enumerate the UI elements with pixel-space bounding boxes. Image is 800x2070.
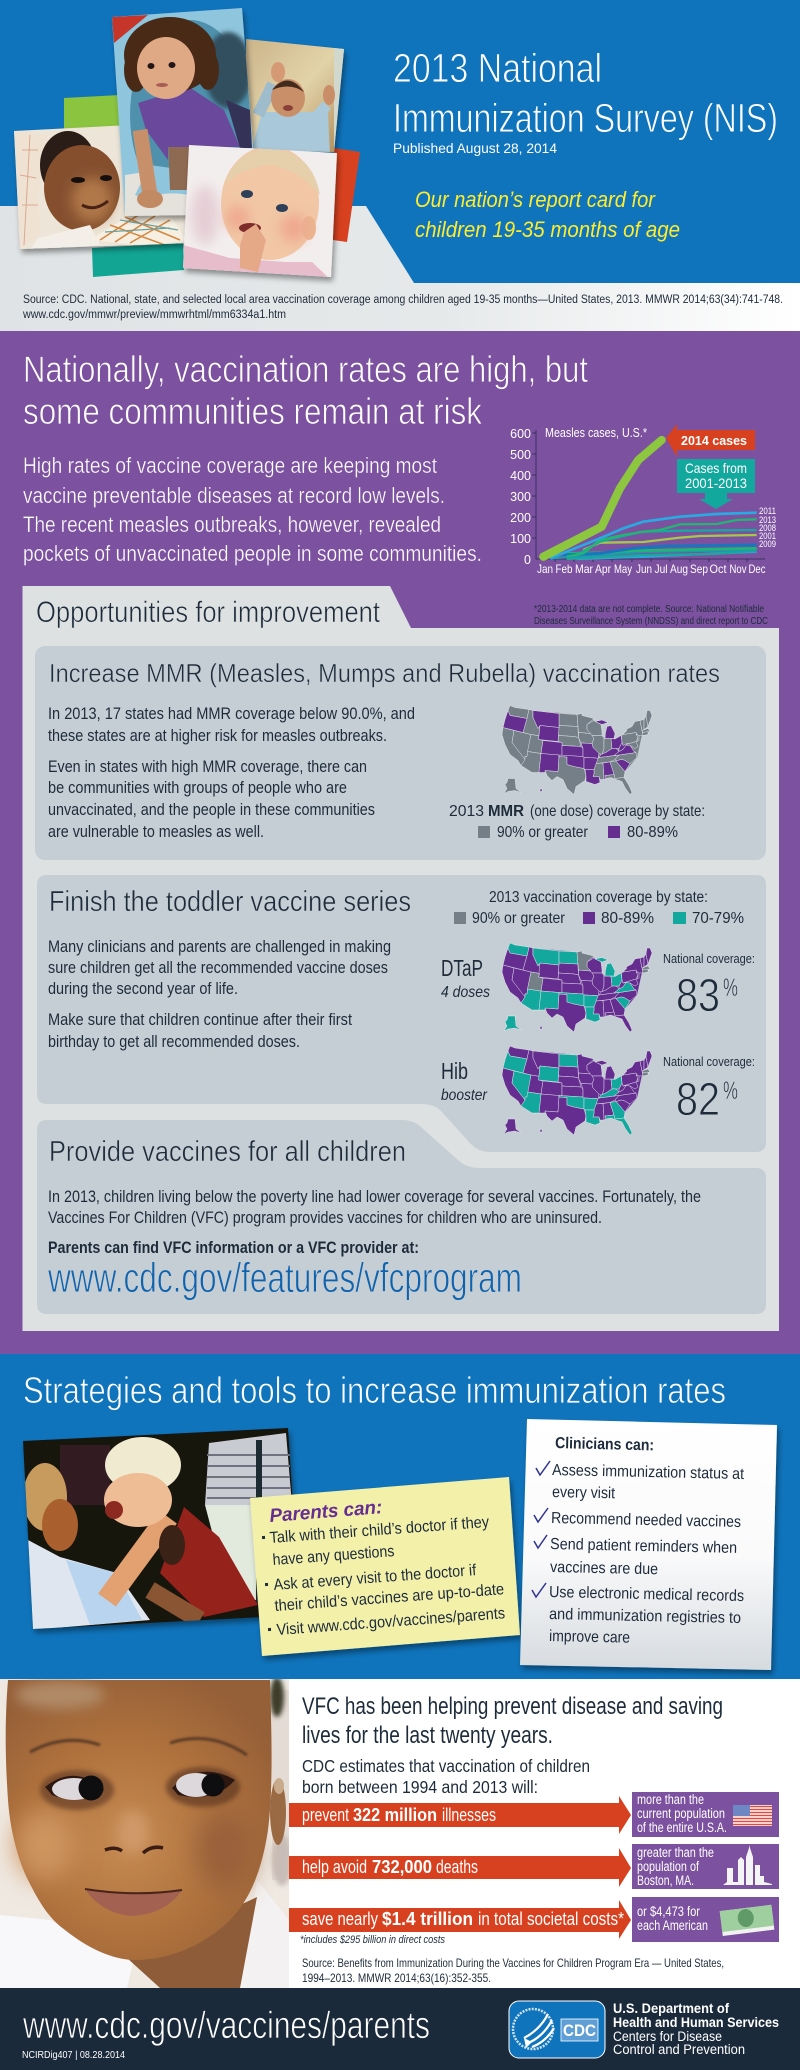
arrow: avoid deaths — [289, 1848, 631, 1887]
blue background — [0, 1354, 800, 1679]
map: Hib coverage by state — [502, 1046, 652, 1135]
tagline — [415, 187, 680, 242]
agency name: Control and Prevention — [613, 2042, 745, 2057]
agency name: Health and Human Services — [613, 2015, 779, 2030]
year labels: 2001 — [759, 531, 776, 541]
publication date: Published August 28, 2014 — [393, 140, 557, 156]
card body text: during the second year of life. — [48, 980, 238, 998]
section heading — [23, 349, 589, 432]
clinicians list: improve care — [549, 1628, 630, 1647]
panel heading: Opportunities for improvement — [36, 596, 381, 629]
logo: HHS and CDC — [509, 2001, 605, 2058]
card body text — [48, 938, 391, 1051]
chart x axis labels — [537, 562, 766, 576]
comparison box: population of USA — [632, 1792, 779, 1837]
DTaP national coverage — [663, 951, 755, 1021]
card body text: are vulnerable to measles as well. — [48, 823, 264, 841]
note: parents can — [250, 1477, 520, 1656]
VFC statement — [302, 1693, 723, 1749]
map legend: 90% or greater — [497, 824, 589, 841]
arrow: cases from 2001-2013: 2001-2013 — [685, 475, 747, 491]
comparison box: population of Boston: population of — [637, 1859, 699, 1874]
arrow: prevent illnesses: 322 million — [353, 1804, 437, 1825]
chart y axis labels: 300 — [510, 490, 531, 504]
card body text: Even in states with high MMR coverage, there can — [48, 758, 367, 776]
panel: strategies and tools — [0, 1354, 800, 1679]
comparison box: cost per American: each American — [637, 1918, 708, 1933]
clinicians list: and immunization registries to — [549, 1606, 741, 1627]
website link: www.cdc.gov/vaccines/parents — [22, 2005, 430, 2047]
clinicians list: every visit — [552, 1484, 616, 1502]
card body text: Parents can find VFC information or a VFC provider at: — [48, 1239, 419, 1257]
DTaP national coverage: 83 — [676, 969, 720, 1021]
chart x axis labels: Jan — [537, 562, 553, 576]
intro paragraph: High rates of vaccine coverage are keeping most — [23, 453, 437, 478]
map legend: 80-89% — [627, 824, 678, 841]
Hib label: Hib — [441, 1058, 468, 1084]
accent block: red — [333, 148, 360, 242]
arrow: save societal costs: $1.4 trillion — [382, 1908, 473, 1929]
card body text: sure children get all the recommended vaccine doses — [48, 959, 388, 977]
CDC estimate text: born between 1994 and 2013 will: — [302, 1777, 538, 1797]
footer background — [0, 1988, 800, 2070]
parents list: their child’s vaccines are up-to-date — [274, 1581, 505, 1615]
photo: mother lifting laughing toddler — [20, 1425, 305, 1635]
comparison box: population of USA: of the entire U.S.A. — [637, 1820, 727, 1835]
section heading: Nationally, vaccination rates are high, but — [23, 349, 589, 390]
year labels — [759, 506, 776, 549]
clinicians list — [549, 1462, 745, 1647]
card background — [37, 1120, 766, 1314]
DTaP label: DTaP — [441, 955, 483, 981]
map: MMR coverage by state — [502, 706, 652, 794]
parents list: Ask at every visit to the doctor if — [273, 1562, 477, 1594]
footer — [0, 1988, 800, 2070]
parents list: have any questions — [272, 1543, 395, 1569]
source citation: 1994–2013. MMWR 2014;63(16):352-355. — [302, 1971, 491, 1985]
comparison box: population of Boston — [632, 1844, 779, 1889]
map legend: 80-89% — [601, 910, 654, 927]
arrow: avoid deaths: help avoid — [302, 1856, 367, 1877]
Hib national coverage: % — [723, 1077, 738, 1105]
card: increase MMR — [35, 646, 766, 860]
header blue background — [0, 0, 800, 284]
chart x axis labels: Jul — [654, 562, 668, 576]
arrow: prevent illnesses: prevent — [302, 1804, 349, 1825]
eyebrows — [30, 1739, 247, 1755]
map legend: 70-79% — [692, 910, 744, 927]
mouth — [85, 1889, 182, 1916]
comparison box: cost per American: or $4,473 for — [637, 1904, 700, 1919]
title — [393, 45, 778, 141]
arrow: save societal costs: save nearly — [302, 1908, 379, 1929]
chart x axis labels: Oct — [710, 562, 727, 576]
card body text: In 2013, children living below the poverty line had lower coverage for several vaccines. Fortunately, the — [48, 1188, 701, 1206]
photo: baby face close-up — [0, 1677, 292, 1988]
panel: VFC benefits — [0, 1677, 800, 1988]
card body text: unvaccinated, and the people in these communities — [48, 801, 375, 819]
footnote: *includes $295 billion in direct costs — [300, 1934, 445, 1946]
tagline: children 19-35 months of age — [415, 217, 680, 242]
chart y axis labels: 100 — [510, 532, 531, 546]
map caption: 2013 — [449, 803, 484, 820]
arrow: 2014 cases: 2014 cases — [681, 433, 747, 448]
map: DTaP coverage by state — [502, 943, 652, 1032]
card heading: Increase MMR (Measles, Mumps and Rubella) vaccination rates — [49, 658, 720, 688]
intro paragraph: vaccine preventable diseases at record low levels. — [23, 483, 445, 508]
card body text: Many clinicians and parents are challenged in making — [48, 938, 391, 956]
icon: money — [720, 1905, 774, 1936]
check marks — [532, 1461, 550, 1597]
map legend — [478, 824, 678, 841]
legend title: 2013 vaccination coverage by state: — [489, 889, 708, 906]
intro paragraph: The recent measles outbreaks, however, revealed — [23, 512, 441, 537]
chart axes — [532, 430, 765, 562]
CDC estimate text — [302, 1756, 590, 1797]
chart x axis labels: Aug — [670, 562, 688, 576]
parents list: Visit www.cdc.gov/vaccines/parents — [276, 1605, 506, 1639]
map caption — [449, 803, 705, 820]
DTaP label — [441, 955, 490, 1001]
intro paragraph: pockets of unvaccinated people in some communities. — [23, 541, 482, 566]
logo: HHS and CDC: CDC — [563, 2021, 596, 2040]
clinicians list: vaccines are due — [550, 1559, 658, 1578]
historical case lines 2001-2013 — [543, 440, 757, 559]
agency name — [613, 2001, 779, 2057]
card body text: Vaccines For Children (VFC) program provides vaccines for children who are uninsured. — [48, 1209, 602, 1227]
map caption: (one dose) coverage by state: — [530, 803, 705, 820]
comparison box: population of Boston: greater than the — [637, 1845, 714, 1860]
Hib national coverage: 82 — [676, 1073, 720, 1125]
VFC statement: lives for the last twenty years. — [302, 1722, 553, 1749]
arrow: avoid deaths: 732,000 — [372, 1856, 432, 1877]
purple background — [0, 331, 800, 1354]
card body text: In 2013, 17 states had MMR coverage below 90.0%, and — [48, 705, 415, 723]
chart y axis labels: 400 — [510, 469, 531, 483]
white background — [0, 1679, 800, 1988]
panel: purple national rates section — [0, 331, 800, 1354]
source citation — [302, 1956, 724, 1985]
header section — [0, 0, 800, 331]
card body text: Make sure that children continue after their first — [48, 1011, 352, 1029]
clinicians list: Send patient reminders when — [550, 1536, 737, 1557]
arrow: cases from 2001-2013 — [677, 459, 755, 509]
note heading: Clinicians can: — [555, 1435, 654, 1454]
chart x axis labels: Dec — [748, 562, 766, 576]
card body text: be communities with groups of people who are — [48, 779, 347, 797]
Hib label — [441, 1058, 488, 1104]
chart x axis labels: May — [614, 562, 632, 576]
chart y axis labels — [510, 427, 531, 567]
parents list — [262, 1514, 506, 1639]
arrow: prevent illnesses: illnesses — [442, 1804, 496, 1825]
arrow: 2014 cases — [666, 424, 755, 457]
card body text: these states are at higher risk for measles outbreaks. — [48, 727, 387, 745]
nose — [105, 1847, 163, 1853]
arrow: avoid deaths: deaths — [436, 1856, 478, 1877]
card body text: birthday to get all recommended doses. — [48, 1033, 300, 1051]
card body text — [48, 1188, 701, 1257]
year labels: 2011 — [759, 506, 776, 516]
clinicians list: Recommend needed vaccines — [551, 1510, 741, 1531]
note heading: Parents can: — [269, 1497, 383, 1527]
chart y axis labels: 200 — [510, 511, 531, 525]
map legend: 90% or greater — [472, 910, 566, 927]
chart x axis labels: Nov — [730, 562, 746, 576]
eyes — [40, 1770, 114, 1810]
year labels: 2009 — [759, 539, 776, 549]
arrow: cases from 2001-2013: Cases from — [685, 460, 747, 476]
card background — [35, 646, 766, 860]
document id: NCIRDig407 | 08.28.2014 — [22, 2049, 125, 2061]
chart x axis labels: Apr — [595, 562, 611, 576]
chart footnote — [534, 604, 768, 627]
intro paragraph — [23, 453, 482, 566]
agency name: U.S. Department of — [613, 2001, 729, 2016]
comparison box: population of USA: more than the — [637, 1792, 704, 1807]
title: 2013 National — [393, 45, 602, 91]
Hib national coverage — [663, 1054, 755, 1125]
Hib national coverage: National coverage: — [663, 1054, 755, 1069]
accent block: teal — [92, 243, 184, 277]
parents list: Talk with their child’s doctor if they — [269, 1514, 490, 1547]
header grey band — [0, 206, 800, 331]
comparison box: cost per American — [632, 1897, 779, 1942]
map legend — [454, 910, 744, 927]
card: finish the toddler vaccine series — [37, 875, 766, 1152]
photo: child with blanket — [10, 120, 195, 255]
clinicians list: Use electronic medical records — [549, 1584, 744, 1605]
map caption: MMR — [488, 803, 524, 820]
clinicians list: Assess immunization status at — [552, 1462, 745, 1483]
source citation — [22, 294, 783, 321]
chart x axis labels: Jun — [636, 562, 652, 576]
chart y axis labels: 600 — [510, 427, 531, 441]
DTaP national coverage: National coverage: — [663, 951, 755, 966]
agency name: Centers for Disease — [613, 2029, 722, 2044]
chart y axis labels: 0 — [524, 553, 531, 567]
chart y axis labels: 500 — [510, 448, 531, 462]
arrow: save societal costs — [289, 1900, 631, 1939]
DTaP label: 4 doses — [441, 984, 490, 1001]
light panel background with tab — [22, 586, 779, 1331]
arrow: prevent illnesses — [289, 1796, 631, 1834]
note: clinicians can — [520, 1419, 777, 1670]
line chart: measles cases — [510, 424, 776, 576]
card heading: Provide vaccines for all children — [49, 1136, 406, 1168]
card: provide vaccines for all children — [37, 1120, 766, 1314]
section heading: some communities remain at risk — [23, 391, 482, 432]
icon: american flag — [733, 1805, 772, 1826]
VFC link: www.cdc.gov/features/vfcprogram — [47, 1254, 522, 1301]
comparison box: population of Boston: Boston, MA. — [637, 1873, 694, 1888]
chart x axis labels: Sep — [690, 562, 708, 576]
CDC estimate text: CDC estimates that vaccination of children — [302, 1756, 590, 1776]
DTaP national coverage: % — [723, 974, 738, 1002]
chart x axis labels: Mar — [575, 562, 593, 576]
icon: city skyline — [723, 1845, 772, 1885]
card body text — [48, 705, 415, 841]
Hib label: booster — [441, 1087, 488, 1104]
source citation: www.cdc.gov/mmwr/preview/mmwrhtml/mm6334a1.htm — [22, 309, 286, 321]
comparison box: population of USA: current population — [637, 1806, 725, 1821]
chart x axis labels: Feb — [556, 562, 573, 576]
accent block: green — [64, 95, 122, 134]
panel: opportunities for improvement — [22, 586, 779, 1331]
year labels: 2013 — [759, 515, 776, 525]
photo: smiling baby — [180, 140, 340, 280]
year labels: 2008 — [759, 523, 776, 533]
tagline: Our nation’s report card for — [415, 187, 657, 212]
photo: toddler in tunnel — [105, 5, 260, 220]
card heading: Finish the toddler vaccine series — [49, 886, 411, 918]
photo: baby with raised arms — [240, 35, 350, 155]
arrow: save societal costs: in total societal costs* — [478, 1908, 624, 1929]
card background — [37, 875, 766, 1152]
chart title: Measles cases, U.S.* — [545, 426, 647, 440]
